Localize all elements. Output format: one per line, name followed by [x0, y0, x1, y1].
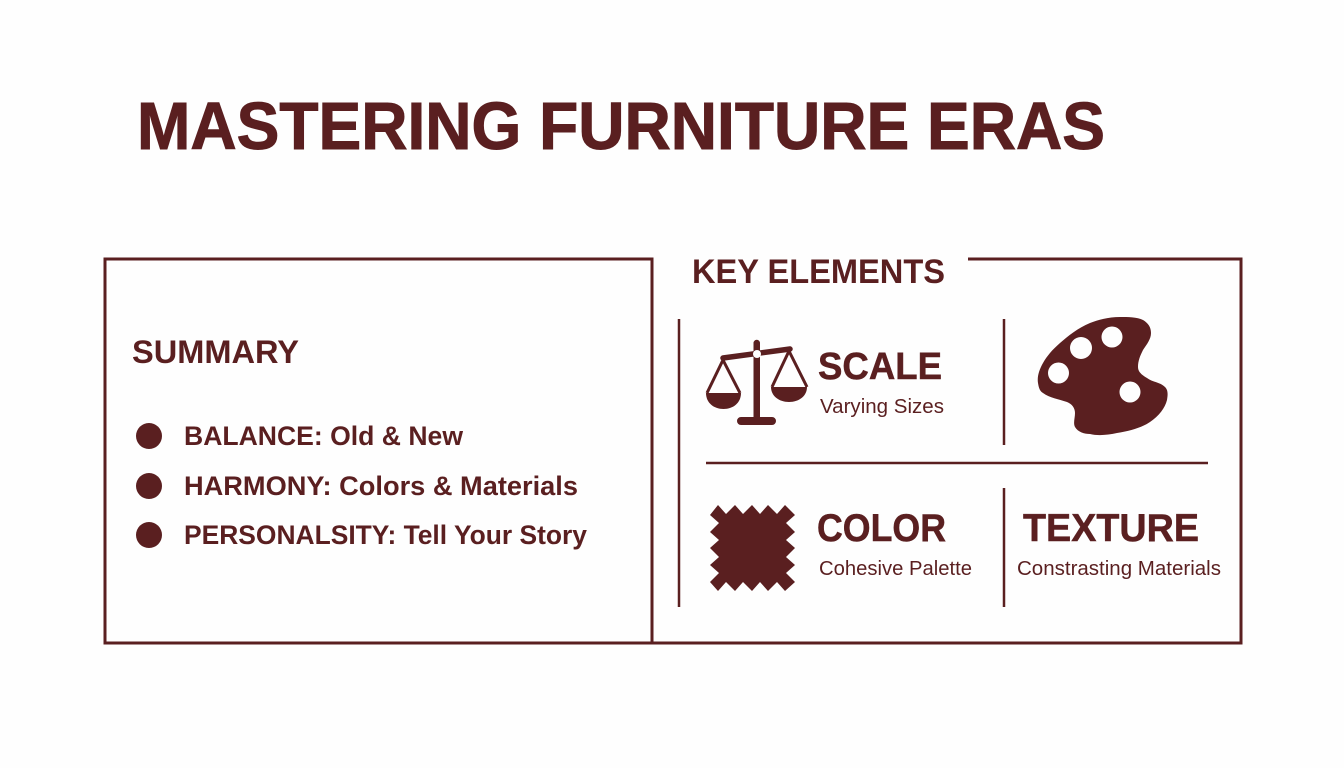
item: scale: [818, 346, 944, 418]
panel: key elements: [652, 253, 1241, 643]
item: color: Cohesive Palette: [819, 558, 972, 580]
icon: balance scale: [706, 340, 807, 425]
icon: paint palette: [1038, 317, 1168, 435]
summary frame: [105, 259, 652, 643]
item: texture: Constrasting Materials: [1017, 558, 1221, 580]
item: color: [817, 507, 972, 580]
bullet: balance: BALANCE: Old & New: [184, 421, 464, 451]
item: scale: SCALE: [818, 346, 942, 388]
icon: fabric swatch: [710, 505, 795, 591]
item: texture: [1017, 507, 1221, 580]
key elements heading: KEY ELEMENTS: [692, 253, 945, 291]
key elements frame: [652, 259, 1241, 643]
bullet: harmony: HARMONY: Colors & Materials: [184, 471, 578, 501]
item: scale: Varying Sizes: [820, 396, 944, 418]
title: MASTERING FURNITURE ERAS: [137, 89, 1105, 164]
item: color: COLOR: [817, 507, 946, 550]
item: texture: TEXTURE: [1023, 507, 1199, 550]
summary heading: SUMMARY: [132, 334, 299, 370]
panel: summary: [105, 259, 652, 643]
bullet: personality: PERSONALSITY: Tell Your Story: [184, 520, 587, 550]
bullet list: [136, 421, 587, 550]
